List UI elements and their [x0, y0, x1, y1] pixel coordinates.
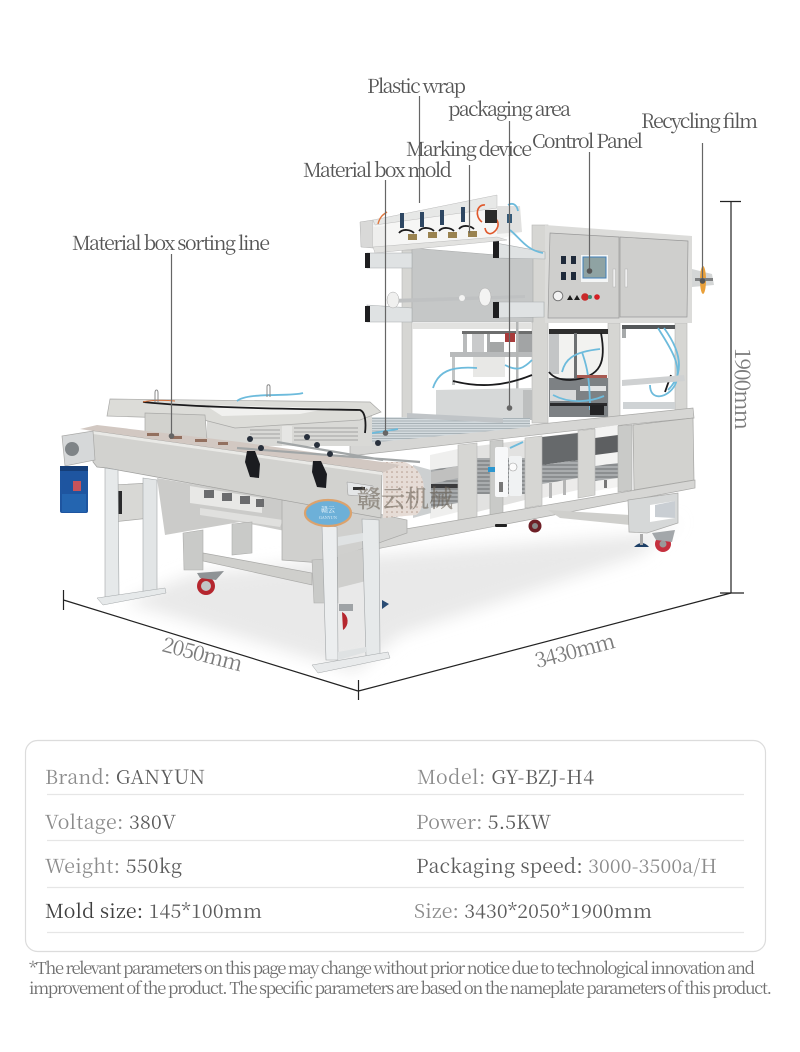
- under-conveyor housing: [157, 478, 407, 603]
- aluminium beams: [365, 241, 545, 322]
- leader: plastic wrap: Plastic wrap: [367, 71, 466, 99]
- model: Model: GY-BZJ-H4: [417, 762, 594, 790]
- clamps: [245, 451, 327, 488]
- leader: control panel: [532, 126, 643, 274]
- front right legs: [312, 519, 390, 673]
- leader: material box sorting line: Material box sorting line: [72, 228, 270, 256]
- motor: [60, 466, 88, 513]
- control cabinet: [545, 225, 714, 323]
- caster rear left: [197, 571, 224, 595]
- dimension: length 3430mm: [358, 593, 731, 700]
- base lower beam: [376, 480, 695, 549]
- middle bay with pneumatics: [549, 329, 608, 417]
- gauge and buttons: [553, 291, 563, 301]
- packaging speed: Packaging speed: 3000-3500a/H: [416, 851, 717, 879]
- watermark logo: [305, 500, 351, 526]
- footnote: *The relevant parameters on this page may change without prior notice due to technological innovation and: [29, 955, 755, 979]
- gearbox: [62, 431, 95, 466]
- film shaft: [387, 288, 525, 308]
- leader: material box sorting line: [72, 228, 270, 439]
- leader: recycling film: Recycling film: [641, 106, 758, 134]
- marking device head: [360, 195, 543, 253]
- leader: material box mold: [303, 155, 452, 436]
- casters: [197, 520, 675, 630]
- leader: control panel: Control Panel: [532, 126, 643, 154]
- leader: marking device: [406, 134, 532, 233]
- leader: packaging area: [448, 94, 571, 411]
- size: Size: 3430*2050*1900mm: [414, 896, 652, 924]
- front left legs: [97, 468, 166, 605]
- leader: packaging area: packaging area: [448, 94, 571, 122]
- guide rails: [237, 442, 420, 462]
- marking nozzles: [399, 207, 477, 240]
- caster center: [495, 520, 542, 532]
- cabinet doors: [548, 233, 619, 318]
- watermark logo: 赣云: [321, 505, 335, 515]
- caster front: [339, 604, 353, 630]
- right bay with tubes: [622, 325, 685, 409]
- leader: recycling film: [641, 106, 758, 284]
- weight: Weight: 550kg: [45, 851, 182, 879]
- switch box: [113, 483, 150, 522]
- dimension: height 1900mm: 1900mm: [728, 348, 758, 430]
- caster rear right: [652, 530, 675, 552]
- footnote: improvement of the product. The specific parameters are based on the nameplate parameters of this product.: [29, 975, 772, 999]
- conveyor roller end: [383, 462, 458, 518]
- indicator lights: [561, 256, 576, 280]
- dimension: width 2050mm: [64, 590, 358, 691]
- dimension: width 2050mm: 2050mm: [159, 629, 246, 678]
- base interior: [430, 425, 618, 519]
- touch screen: [581, 255, 608, 282]
- packaging machine: [60, 195, 714, 673]
- dimension: height 1900mm: [720, 202, 758, 593]
- base frame top rail: [350, 408, 694, 456]
- recycling film bracket: [692, 266, 714, 294]
- electrical cabinet door: [633, 418, 694, 490]
- mold size: Mold size: 145*100mm: [45, 896, 262, 924]
- rear frame posts: [402, 225, 687, 423]
- brand: Brand: GANYUN: [45, 762, 205, 790]
- roller table: [347, 413, 530, 445]
- footnote: [29, 955, 772, 999]
- base uprights: [458, 425, 632, 521]
- watermark logo: GANYUN: [319, 515, 338, 521]
- bracket: [347, 482, 373, 497]
- left packaging bay: [412, 310, 532, 420]
- watermark text: 赣云机械: [357, 479, 453, 514]
- dimension: length 3430mm: 3430mm: [531, 625, 618, 675]
- leader: material box mold: Material box mold: [303, 155, 452, 183]
- rear sorting frame: [107, 385, 381, 446]
- voltage: Voltage: 380V: [45, 807, 176, 835]
- leader: plastic wrap: [367, 71, 466, 203]
- power: Power: 5.5KW: [416, 807, 551, 835]
- conveyor body: [60, 425, 420, 518]
- leveling foot: [634, 534, 649, 547]
- leader: marking device: Marking device: [406, 134, 532, 162]
- upper left panel: [412, 248, 533, 322]
- door handles: [613, 269, 616, 287]
- air filter unit: [488, 442, 523, 497]
- right legs: [548, 493, 678, 533]
- ground shadow: [125, 520, 680, 672]
- parameter card: [26, 740, 766, 952]
